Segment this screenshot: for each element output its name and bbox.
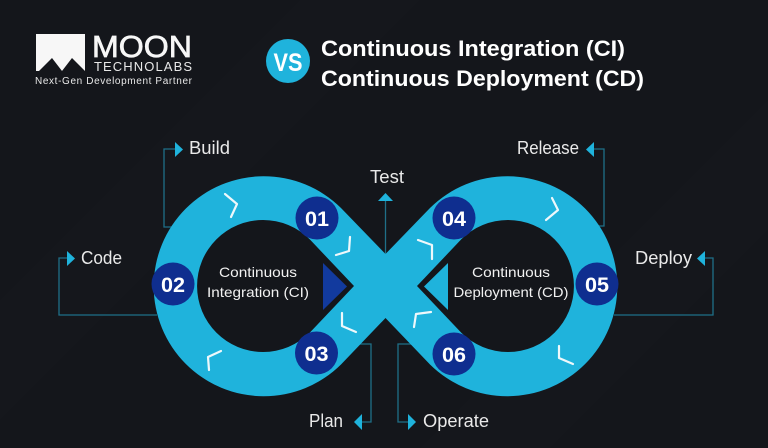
flow chevrons xyxy=(208,194,573,370)
left inner circle xyxy=(197,220,354,352)
label: continuous deployment: Deployment (CD) xyxy=(454,284,568,300)
label: continuous integration xyxy=(207,264,309,300)
cyan band xyxy=(154,176,617,396)
arrowheads xyxy=(67,142,705,430)
badge 05: 05 xyxy=(585,274,609,297)
step labels: Test xyxy=(370,167,404,187)
label: continuous integration: Continuous xyxy=(219,264,297,280)
label: continuous deployment: Continuous xyxy=(472,264,550,280)
badge 05 xyxy=(576,262,618,306)
left pointer triangle xyxy=(323,263,347,310)
step labels: Release xyxy=(517,138,579,158)
badge 06: 06 xyxy=(442,344,466,367)
badge 01: 01 xyxy=(305,208,329,231)
step labels: Code xyxy=(81,248,122,268)
step labels: Build xyxy=(189,138,230,158)
label: continuous deployment xyxy=(454,264,568,300)
step labels: Plan xyxy=(309,411,343,431)
center labels xyxy=(207,264,568,300)
title: Continuous Deployment (CD) xyxy=(321,66,644,91)
right pointer triangle xyxy=(424,263,448,310)
step labels: Operate xyxy=(423,411,489,431)
title: Continuous Integration (CI) xyxy=(321,36,625,61)
badge 03: 03 xyxy=(304,343,328,366)
badge 02 xyxy=(152,262,194,306)
logo: Moon Technolabs xyxy=(35,29,193,87)
title xyxy=(321,36,644,91)
badge 02: 02 xyxy=(161,274,185,297)
label: continuous integration: Integration (CI) xyxy=(207,284,309,300)
step labels xyxy=(81,138,692,431)
vs badge xyxy=(266,39,310,83)
step badges xyxy=(152,196,618,376)
logo subtitle: TECHNOLABS xyxy=(94,59,192,74)
badge 01 xyxy=(296,196,338,240)
badge 03 xyxy=(295,332,338,374)
badge 06 xyxy=(432,332,476,376)
step labels: Deploy xyxy=(635,248,692,268)
badge 04 xyxy=(432,196,476,240)
logo wordmark: MOON xyxy=(92,29,192,64)
connector lines xyxy=(59,149,713,422)
logo tagline: Next-Gen Development Partner xyxy=(35,76,193,87)
badge 04: 04 xyxy=(442,208,466,231)
icon: paper mountain mark xyxy=(36,34,85,71)
right inner circle xyxy=(417,220,574,352)
vs badge: VS xyxy=(274,49,302,77)
infinity loop xyxy=(154,176,617,396)
